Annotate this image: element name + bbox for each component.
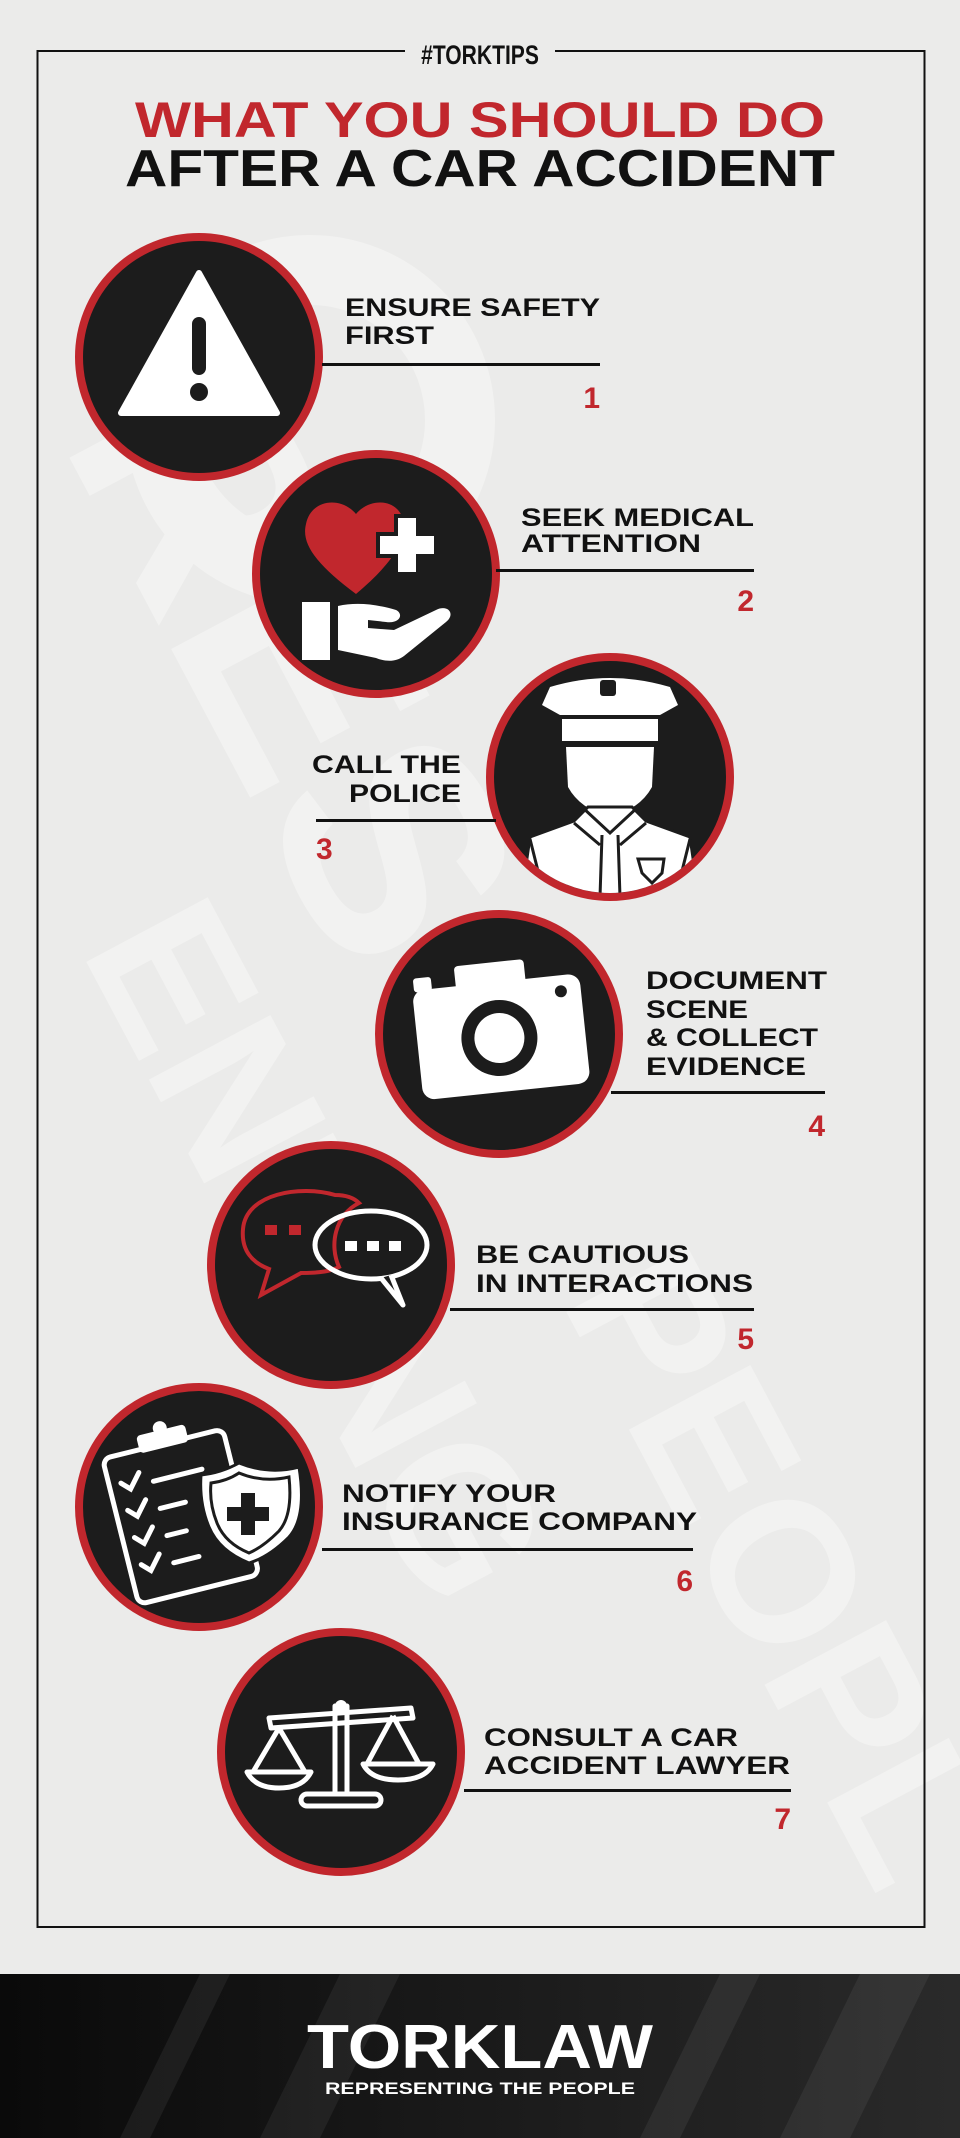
step 4: document: & COLLECT (646, 1024, 818, 1052)
step 7: lawyer (221, 1632, 791, 1872)
step 6: insurance: 6 (676, 1565, 693, 1598)
step 7: lawyer: CONSULT A CAR (484, 1724, 738, 1752)
icon: speech bubbles (211, 1145, 451, 1385)
footer (0, 1974, 960, 2138)
text: ENTING (42, 865, 594, 1637)
icon: heart and hand (256, 454, 496, 694)
text: RES (3, 312, 590, 1015)
title (125, 92, 835, 198)
step 6: insurance: NOTIFY YOUR (342, 1480, 556, 1508)
step 4: document (379, 914, 827, 1154)
step 3: police: 3 (316, 833, 333, 866)
footer: REPRESENTING THE PEOPLE (325, 2079, 635, 2098)
step 5: cautious: 5 (737, 1323, 754, 1356)
step 4: document: 4 (808, 1110, 825, 1143)
step 2: medical: 2 (737, 585, 754, 618)
step 3: police: POLICE (349, 780, 461, 808)
step 2: medical (256, 454, 754, 694)
step 7: lawyer: ACCIDENT LAWYER (484, 1752, 790, 1780)
step 7: lawyer: 7 (774, 1803, 791, 1836)
step 1: ensure safety: 1 (583, 382, 600, 415)
step 3: police (312, 657, 730, 907)
icon: scales of justice (221, 1632, 461, 1872)
step 1: ensure safety: ENSURE SAFETY (345, 294, 600, 322)
title: AFTER A CAR ACCIDENT (125, 140, 835, 198)
step 1: ensure safety (79, 237, 600, 477)
step 5: cautious: IN INTERACTIONS (476, 1270, 753, 1298)
hashtag: #TORKTIPS (421, 41, 539, 71)
step 4: document: SCENE (646, 996, 748, 1024)
icon: clipboard and shield (79, 1387, 319, 1627)
step 5: cautious (211, 1145, 754, 1385)
title: WHAT YOU SHOULD DO (135, 92, 825, 148)
step 1: ensure safety: FIRST (345, 322, 434, 350)
icon: camera (379, 914, 619, 1154)
step 4: document: DOCUMENT (646, 967, 827, 995)
step 4: document: EVIDENCE (646, 1053, 806, 1081)
step 6: insurance (79, 1387, 697, 1627)
icon: warning circle (79, 237, 319, 477)
step 5: cautious: BE CAUTIOUS (476, 1241, 689, 1269)
step 2: medical: SEEK MEDICAL (521, 504, 754, 532)
step 6: insurance: INSURANCE COMPANY (342, 1508, 697, 1536)
logo text: TORKLAW (307, 2013, 654, 2082)
step 2: medical: ATTENTION (521, 530, 701, 558)
step 3: police: CALL THE (312, 751, 461, 779)
icon: police officer (490, 657, 730, 907)
